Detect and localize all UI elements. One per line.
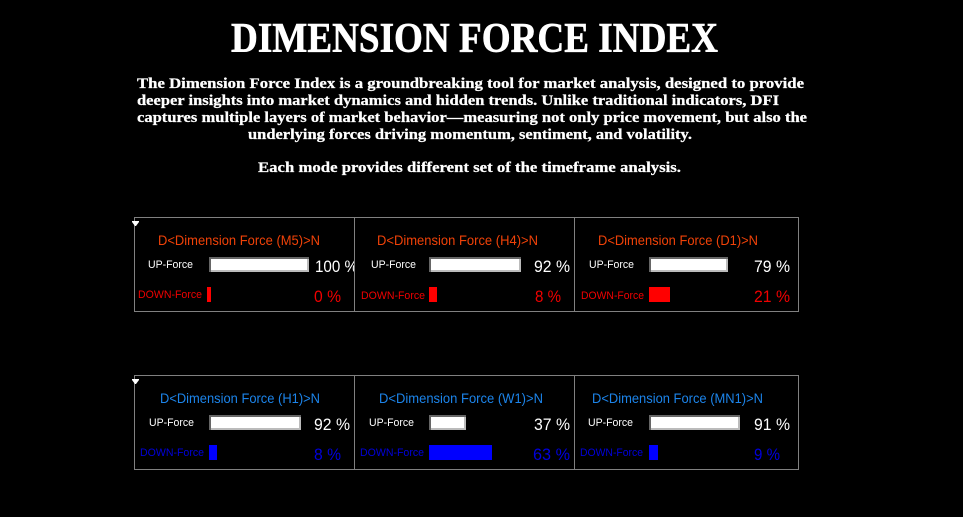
panel frame: bottom row — [134, 376, 798, 470]
description text block — [137, 76, 808, 143]
panel: H1: 8 % — [314, 445, 341, 464]
panel: H1: DOWN-Force — [140, 447, 204, 459]
panel: H4: D<Dimension Force (H4)>N — [377, 232, 538, 248]
panel: MN1: DOWN-Force — [580, 447, 643, 459]
panel: H1 — [140, 390, 350, 464]
panel: D1: UP-Force — [589, 259, 634, 271]
panel: MN1: UP-Force — [588, 417, 633, 429]
panel: H4: UP-Force — [371, 259, 416, 271]
panel: M5 — [138, 235, 354, 302]
panel: D1: 21 % — [754, 287, 790, 306]
panel: D1 — [581, 232, 790, 306]
panel: D1: DOWN-Force — [581, 290, 644, 302]
panel: W1: 37 % — [534, 415, 570, 434]
panel: W1: 63 % — [533, 445, 570, 464]
description text block: underlying forces driving momentum, sentiment, and volatility. — [248, 127, 692, 143]
panel: MN1: 9 % — [754, 445, 780, 464]
panel: M5: D<Dimension Force (M5)>N — [158, 232, 320, 248]
panel: H1: UP-Force — [149, 417, 194, 429]
panel: H4 — [361, 232, 570, 306]
panel: W1 — [360, 390, 570, 464]
panel: D1: 79 % — [754, 257, 790, 276]
description text block: captures multiple layers of market behavior—measuring not only price movement, but also the — [137, 110, 808, 126]
panel: H4: 8 % — [535, 287, 561, 306]
panel: W1: UP-Force — [369, 417, 414, 429]
description text block: deeper insights into market dynamics and hidden trends. Unlike traditional indicators, DFI — [137, 93, 779, 109]
panel: M5: 0 % — [314, 287, 341, 306]
panel: W1: D<Dimension Force (W1)>N — [379, 390, 543, 406]
title: DIMENSION FORCE INDEX — [231, 16, 718, 62]
icon: collapse arrow — [132, 221, 139, 226]
panel: H1: 92 % — [314, 415, 350, 434]
panel: MN1 — [580, 390, 790, 464]
panel frame: top row — [134, 218, 798, 312]
panel: W1: DOWN-Force — [360, 447, 424, 459]
panel group: blue timeframes — [132, 376, 798, 470]
panel: H4: DOWN-Force — [361, 290, 425, 302]
panel: M5: DOWN-Force — [138, 289, 202, 301]
panel: D1: D<Dimension Force (D1)>N — [598, 232, 758, 248]
description text block: The Dimension Force Index is a groundbreaking tool for market analysis, designed to provide — [137, 76, 805, 92]
panel group: red timeframes — [132, 218, 798, 312]
panel: MN1: 91 % — [754, 415, 790, 434]
panel: MN1: D<Dimension Force (MN1)>N — [592, 390, 763, 406]
mode note: Each mode provides different set of the timeframe analysis. — [258, 160, 681, 176]
panel: H4: 92 % — [534, 257, 570, 276]
panel: H1: D<Dimension Force (H1)>N — [160, 390, 320, 406]
panel: M5: 100 % — [315, 257, 358, 276]
panel: M5: UP-Force — [148, 259, 193, 271]
icon: collapse arrow — [132, 379, 139, 384]
